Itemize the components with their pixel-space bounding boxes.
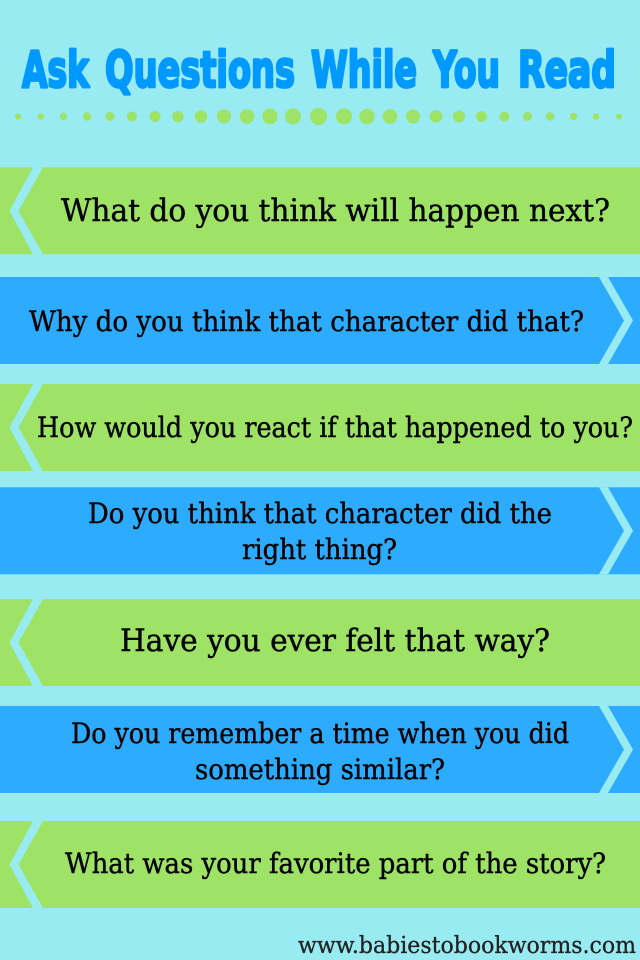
title: You — [432, 41, 500, 99]
panel: question 1: What do you think will happen next? — [61, 193, 610, 229]
dotted divider — [15, 108, 622, 125]
panel: question 5: Have you ever felt that way? — [120, 623, 550, 659]
panel: question 2 — [0, 277, 640, 364]
panel: question 7 — [0, 821, 640, 908]
panel: question 3 — [0, 384, 640, 471]
panel: question 6: Do you remember a time when you did — [71, 717, 569, 750]
panel: question 4: Do you think that character did the — [88, 497, 552, 530]
title: Ask — [22, 41, 90, 99]
panel: question 7: What was your favorite part of the story? — [65, 847, 606, 880]
panel: question 5 — [0, 599, 640, 686]
title: Questions — [105, 41, 295, 99]
title: While — [311, 41, 417, 99]
panel: question 2: Why do you think that character did that? — [29, 305, 584, 338]
title — [22, 41, 616, 99]
panel: question 6 — [0, 706, 640, 793]
panel: question 1 — [0, 167, 640, 254]
panel: question 6: something similar? — [195, 753, 445, 786]
panel: question 4 — [0, 487, 640, 574]
panel: question 4: right thing? — [242, 533, 397, 566]
